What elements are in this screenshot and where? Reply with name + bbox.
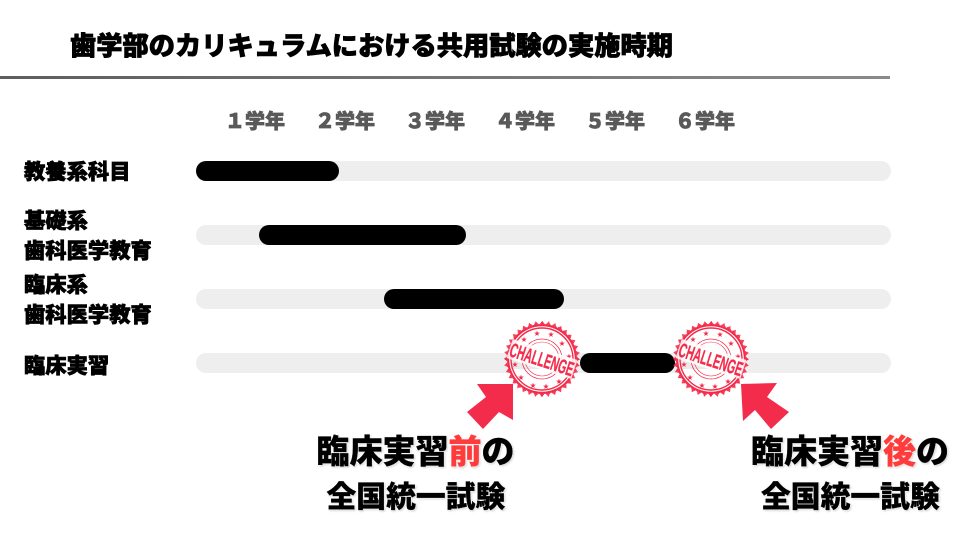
text: ★: [703, 328, 710, 338]
text: ★: [717, 330, 724, 338]
text: CHALLENGE: [507, 339, 576, 381]
row label: 基礎系歯科医学教育: [24, 208, 152, 262]
text: ★: [566, 352, 573, 360]
text: ★: [687, 372, 694, 382]
text: CHALLENGE: [676, 339, 745, 381]
text: ★: [548, 330, 555, 338]
text: ★: [512, 360, 519, 368]
callout: 臨床実習前の全国統一試験: 臨床実習前の: [316, 433, 514, 470]
period bar: 臨床系歯科医学教育: [384, 289, 564, 309]
year axis labels: ２学年: [315, 111, 375, 133]
text: ★: [556, 376, 563, 386]
row label: 臨床系歯科医学教育: 歯科医学教育: [24, 302, 152, 326]
text: ★: [530, 380, 537, 390]
text: ★: [559, 338, 566, 348]
period bar: 教養系科目: [196, 161, 339, 181]
text: ★: [728, 338, 735, 348]
track: 臨床実習: [196, 353, 891, 373]
text: ★: [735, 352, 742, 360]
row label: 教養系科目: 教養系科目: [24, 160, 130, 184]
year axis labels: ４学年: [495, 111, 555, 133]
text: ★: [699, 380, 706, 390]
row label: 臨床実習: 臨床実習: [24, 354, 109, 378]
year axis labels: [225, 110, 735, 133]
callout: 臨床実習後の全国統一試験: 全国統一試験: [761, 481, 940, 514]
year axis labels: １学年: [225, 111, 285, 133]
callout: 臨床実習前の全国統一試験: [316, 433, 515, 514]
icon: challenge stamp left: [504, 321, 580, 397]
year axis labels: ５学年: [585, 111, 645, 133]
callout: 臨床実習後の全国統一試験: 臨床実習後の: [751, 433, 949, 470]
row label: 基礎系歯科医学教育: 基礎系: [24, 208, 88, 232]
year axis labels: ３学年: [405, 111, 465, 133]
text: ★: [690, 334, 697, 344]
title: 歯学部のカリキュラムにおける共用試験の実施時期: [70, 31, 673, 61]
row label: 基礎系歯科医学教育: 歯科医学教育: [24, 238, 152, 262]
text: ★: [534, 328, 541, 338]
year axis labels: ６学年: [675, 111, 735, 133]
period bar: 臨床実習: [580, 353, 675, 373]
text: ★: [681, 360, 688, 368]
period bar: 基礎系歯科医学教育: [259, 225, 466, 245]
row label: 臨床系歯科医学教育: 臨床系: [24, 272, 88, 296]
track: 臨床系歯科医学教育: [196, 289, 891, 309]
track: 教養系科目: [196, 161, 891, 181]
callout: 臨床実習後の全国統一試験: [751, 433, 950, 514]
track: 基礎系歯科医学教育: [196, 225, 891, 245]
text: ★: [521, 334, 528, 344]
text: ★: [712, 382, 719, 390]
icon: challenge stamp right: [673, 321, 749, 397]
text: ★: [725, 376, 732, 386]
row label: 臨床系歯科医学教育: [24, 272, 152, 326]
text: ★: [518, 372, 525, 382]
text: ★: [543, 382, 550, 390]
callout: 臨床実習前の全国統一試験: 全国統一試験: [326, 481, 505, 514]
